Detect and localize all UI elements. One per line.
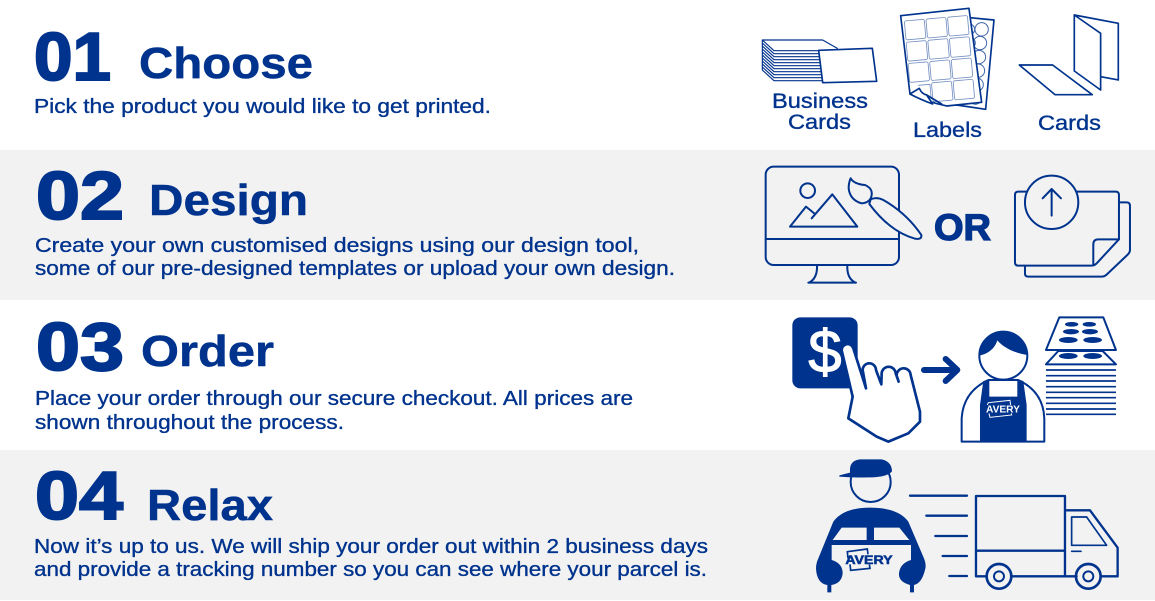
step number 02: 02: [36, 158, 124, 234]
description: [34, 535, 708, 581]
band: [0, 150, 1155, 300]
description: Pick the product you would like to get printed.: [34, 95, 491, 118]
label: business cards: [772, 90, 868, 134]
icon: print worker with apron: [962, 331, 1044, 442]
label: business cards: Business: [772, 90, 868, 113]
step number 04: 04: [35, 458, 123, 534]
band: [0, 300, 1155, 450]
step number 03: 03: [36, 309, 124, 385]
heading: design: Design: [149, 176, 308, 225]
icon: delivery person head and cap: [839, 459, 892, 502]
description: Now it’s up to us. We will ship your order out within 2 business days: [34, 535, 708, 558]
label: cards: Cards: [1038, 112, 1101, 135]
icon: hand pressing pay button: [792, 317, 920, 442]
icon: stack of printed sheets: [1046, 317, 1116, 414]
step number 01: 01: [34, 19, 111, 95]
label: business cards: Cards: [788, 111, 851, 134]
label: labels: Labels: [913, 119, 982, 142]
icon: delivery person carrying parcel: [816, 508, 926, 592]
panel: step 02 design: [0, 150, 1155, 300]
description: some of our pre-designed templates or upload your own design.: [35, 257, 675, 280]
description: [35, 234, 675, 280]
panel: step 04 relax: [0, 450, 1155, 600]
description: Place your order through our secure checkout. All prices are: [35, 387, 633, 410]
icon: business cards: [762, 40, 877, 83]
motion lines: [910, 496, 967, 576]
icon: monitor with paintbrush: [766, 167, 921, 283]
description: and provide a tracking number so you can see where your parcel is.: [34, 558, 707, 581]
description: Create your own customised designs using our design tool,: [35, 234, 639, 257]
heading: choose: Choose: [139, 39, 313, 88]
band: [0, 0, 1155, 150]
description: [35, 387, 633, 434]
panel: step 01 choose: [0, 0, 1155, 150]
heading: relax: Relax: [147, 481, 274, 530]
icon: label sheets: [901, 8, 994, 109]
icon: upload file: [1015, 176, 1130, 277]
icon: print worker with apron: AVERY: [986, 405, 1020, 416]
icon: folded cards: [1019, 15, 1118, 95]
panel: step 03 order: [0, 300, 1155, 450]
text: or: OR: [934, 207, 991, 248]
icon: delivery person carrying parcel: AVERY: [845, 554, 893, 567]
arrow: [924, 359, 957, 381]
band: [0, 450, 1155, 600]
icon: hand pressing pay button: $: [808, 318, 842, 385]
heading: order: Order: [141, 327, 274, 376]
description: shown throughout the process.: [35, 411, 344, 434]
icon: delivery truck: [976, 496, 1118, 589]
